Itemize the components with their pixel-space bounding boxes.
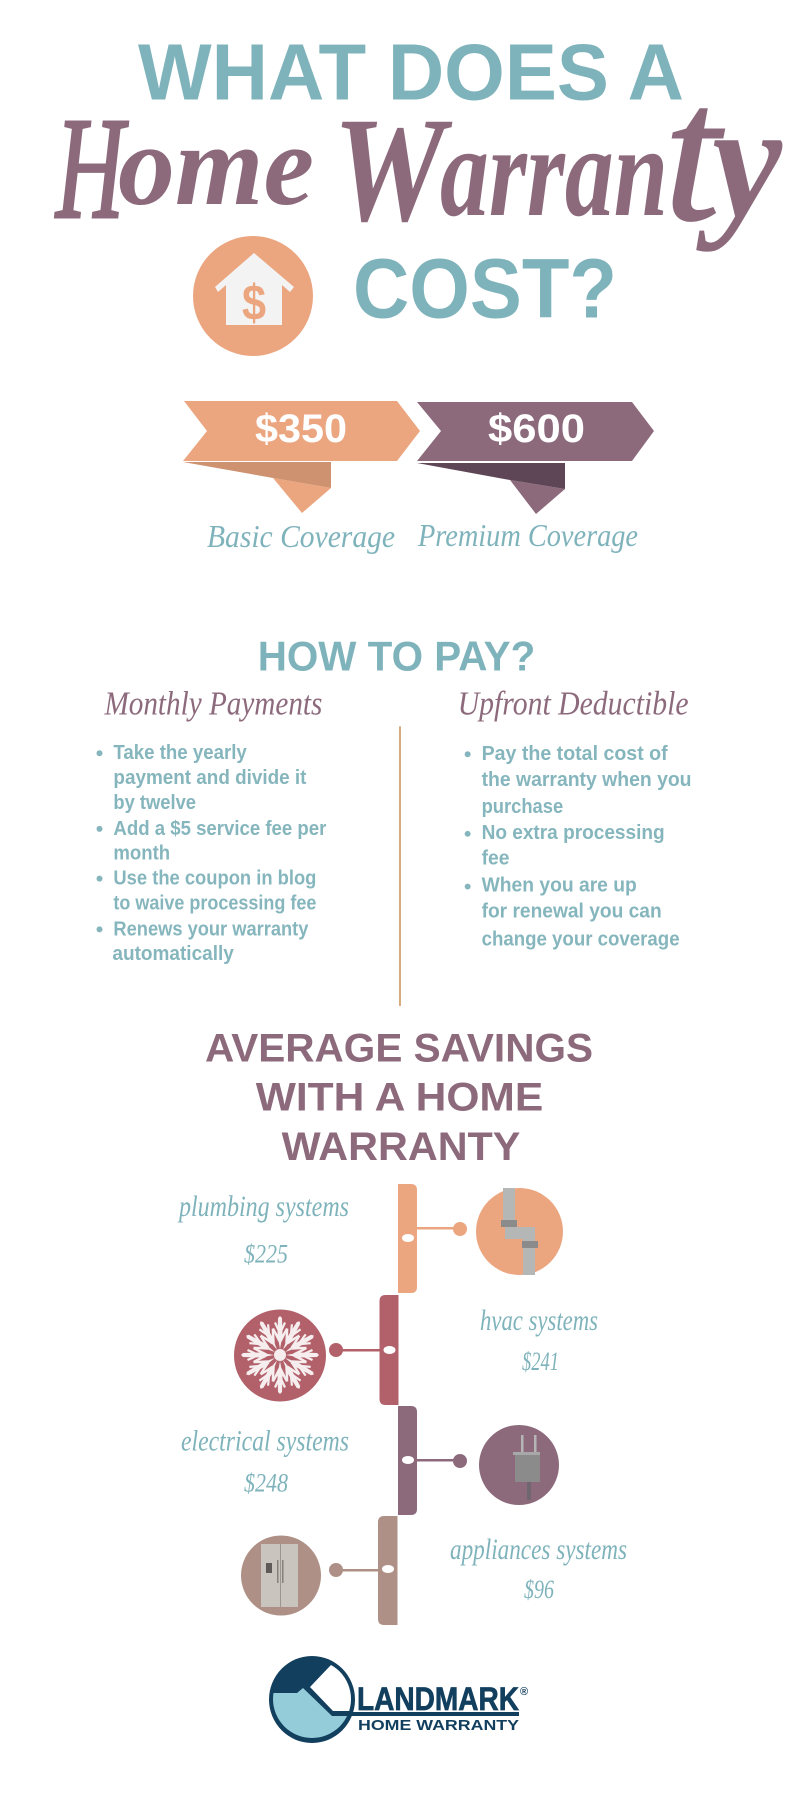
logo: landmark home warranty: ®	[520, 1686, 528, 1698]
divider	[399, 726, 401, 1006]
heading: average savings: AVERAGE SAVINGS	[205, 1027, 593, 1071]
ribbon: basic price: $350	[255, 407, 347, 451]
list: monthly payments: to waive processing fee	[113, 892, 316, 914]
title line: home warranty: ome	[118, 102, 314, 229]
timeline item: hvac	[234, 1295, 598, 1405]
title line: cost: COST?	[353, 242, 617, 336]
value: 241: $241	[522, 1347, 559, 1376]
label: hvac systems: hvac systems	[480, 1304, 598, 1337]
heading: average savings: WARRANTY	[282, 1125, 520, 1169]
list: upfront deductible: Pay the total cost of	[482, 743, 668, 765]
value: 248: $248	[244, 1468, 288, 1497]
list: upfront deductible: change your coverage	[482, 928, 680, 950]
subheading: upfront deductible: Upfront Deductible	[458, 685, 689, 722]
list: monthly payments: payment and divide it	[113, 767, 307, 789]
icon: refrigerator	[261, 1544, 298, 1607]
ribbon: premium price: $600	[488, 407, 585, 451]
title line: home warranty: y	[696, 69, 783, 252]
list: monthly payments	[97, 742, 327, 965]
title line: home warranty	[55, 46, 783, 262]
list: upfront deductible: purchase	[482, 796, 563, 818]
value: 96: $96	[524, 1575, 554, 1604]
timeline item: appliances	[241, 1516, 627, 1625]
logo: landmark home warranty: HOME WARRANTY	[358, 1717, 519, 1734]
icon: house with dollar sign	[193, 236, 313, 356]
list: monthly payments: Add a $5 service fee per	[113, 818, 327, 840]
list: upfront deductible	[465, 743, 692, 950]
label: basic coverage: Basic Coverage	[207, 518, 395, 554]
label: electrical systems: electrical systems	[181, 1425, 349, 1458]
ribbon: basic price	[183, 401, 420, 513]
list: upfront deductible: When you are up	[482, 875, 637, 897]
icon: pipe	[501, 1188, 538, 1275]
heading: average savings: WITH A HOME	[256, 1075, 543, 1119]
section: how to pay	[97, 633, 692, 1169]
timeline item: plumbing	[177, 1184, 563, 1293]
label: premium coverage: Premium Coverage	[417, 517, 638, 553]
list: upfront deductible: for renewal you can	[482, 900, 662, 922]
value: 225: $225	[244, 1240, 288, 1269]
title line: home warranty: W	[333, 87, 453, 253]
list: monthly payments: Use the coupon in blog	[113, 868, 316, 890]
logo: landmark home warranty: LANDMARK	[357, 1681, 519, 1717]
list: monthly payments: Take the yearly	[113, 742, 247, 764]
icon: plug	[513, 1435, 540, 1500]
heading: average savings	[205, 1027, 593, 1169]
subheading: monthly payments: Monthly Payments	[104, 685, 322, 722]
icon: house with dollar sign: $	[242, 275, 266, 331]
list: monthly payments: automatically	[112, 943, 234, 965]
list: monthly payments: by twelve	[113, 792, 196, 814]
logo: landmark home warranty	[269, 1656, 528, 1743]
label: appliances systems: appliances systems	[450, 1533, 627, 1566]
label: plumbing systems: plumbing systems	[177, 1190, 349, 1223]
title	[55, 28, 783, 336]
list: monthly payments: month	[113, 843, 170, 865]
title line: home warranty: arran	[440, 100, 668, 244]
title line: what does a: WHAT DOES A	[138, 28, 684, 116]
timeline item: electrical	[181, 1406, 559, 1515]
title line: home warranty: H	[55, 89, 129, 249]
list: upfront deductible: the warranty when you	[482, 769, 692, 791]
list: monthly payments: Renews your warranty	[113, 918, 308, 940]
icon: snowflake	[241, 1316, 319, 1394]
list: upfront deductible: No extra processing	[482, 822, 665, 844]
heading: how to pay: HOW TO PAY?	[258, 633, 535, 680]
list: upfront deductible: fee	[482, 848, 509, 870]
ribbon: premium price	[417, 402, 654, 514]
title line: home warranty: t	[664, 46, 725, 262]
